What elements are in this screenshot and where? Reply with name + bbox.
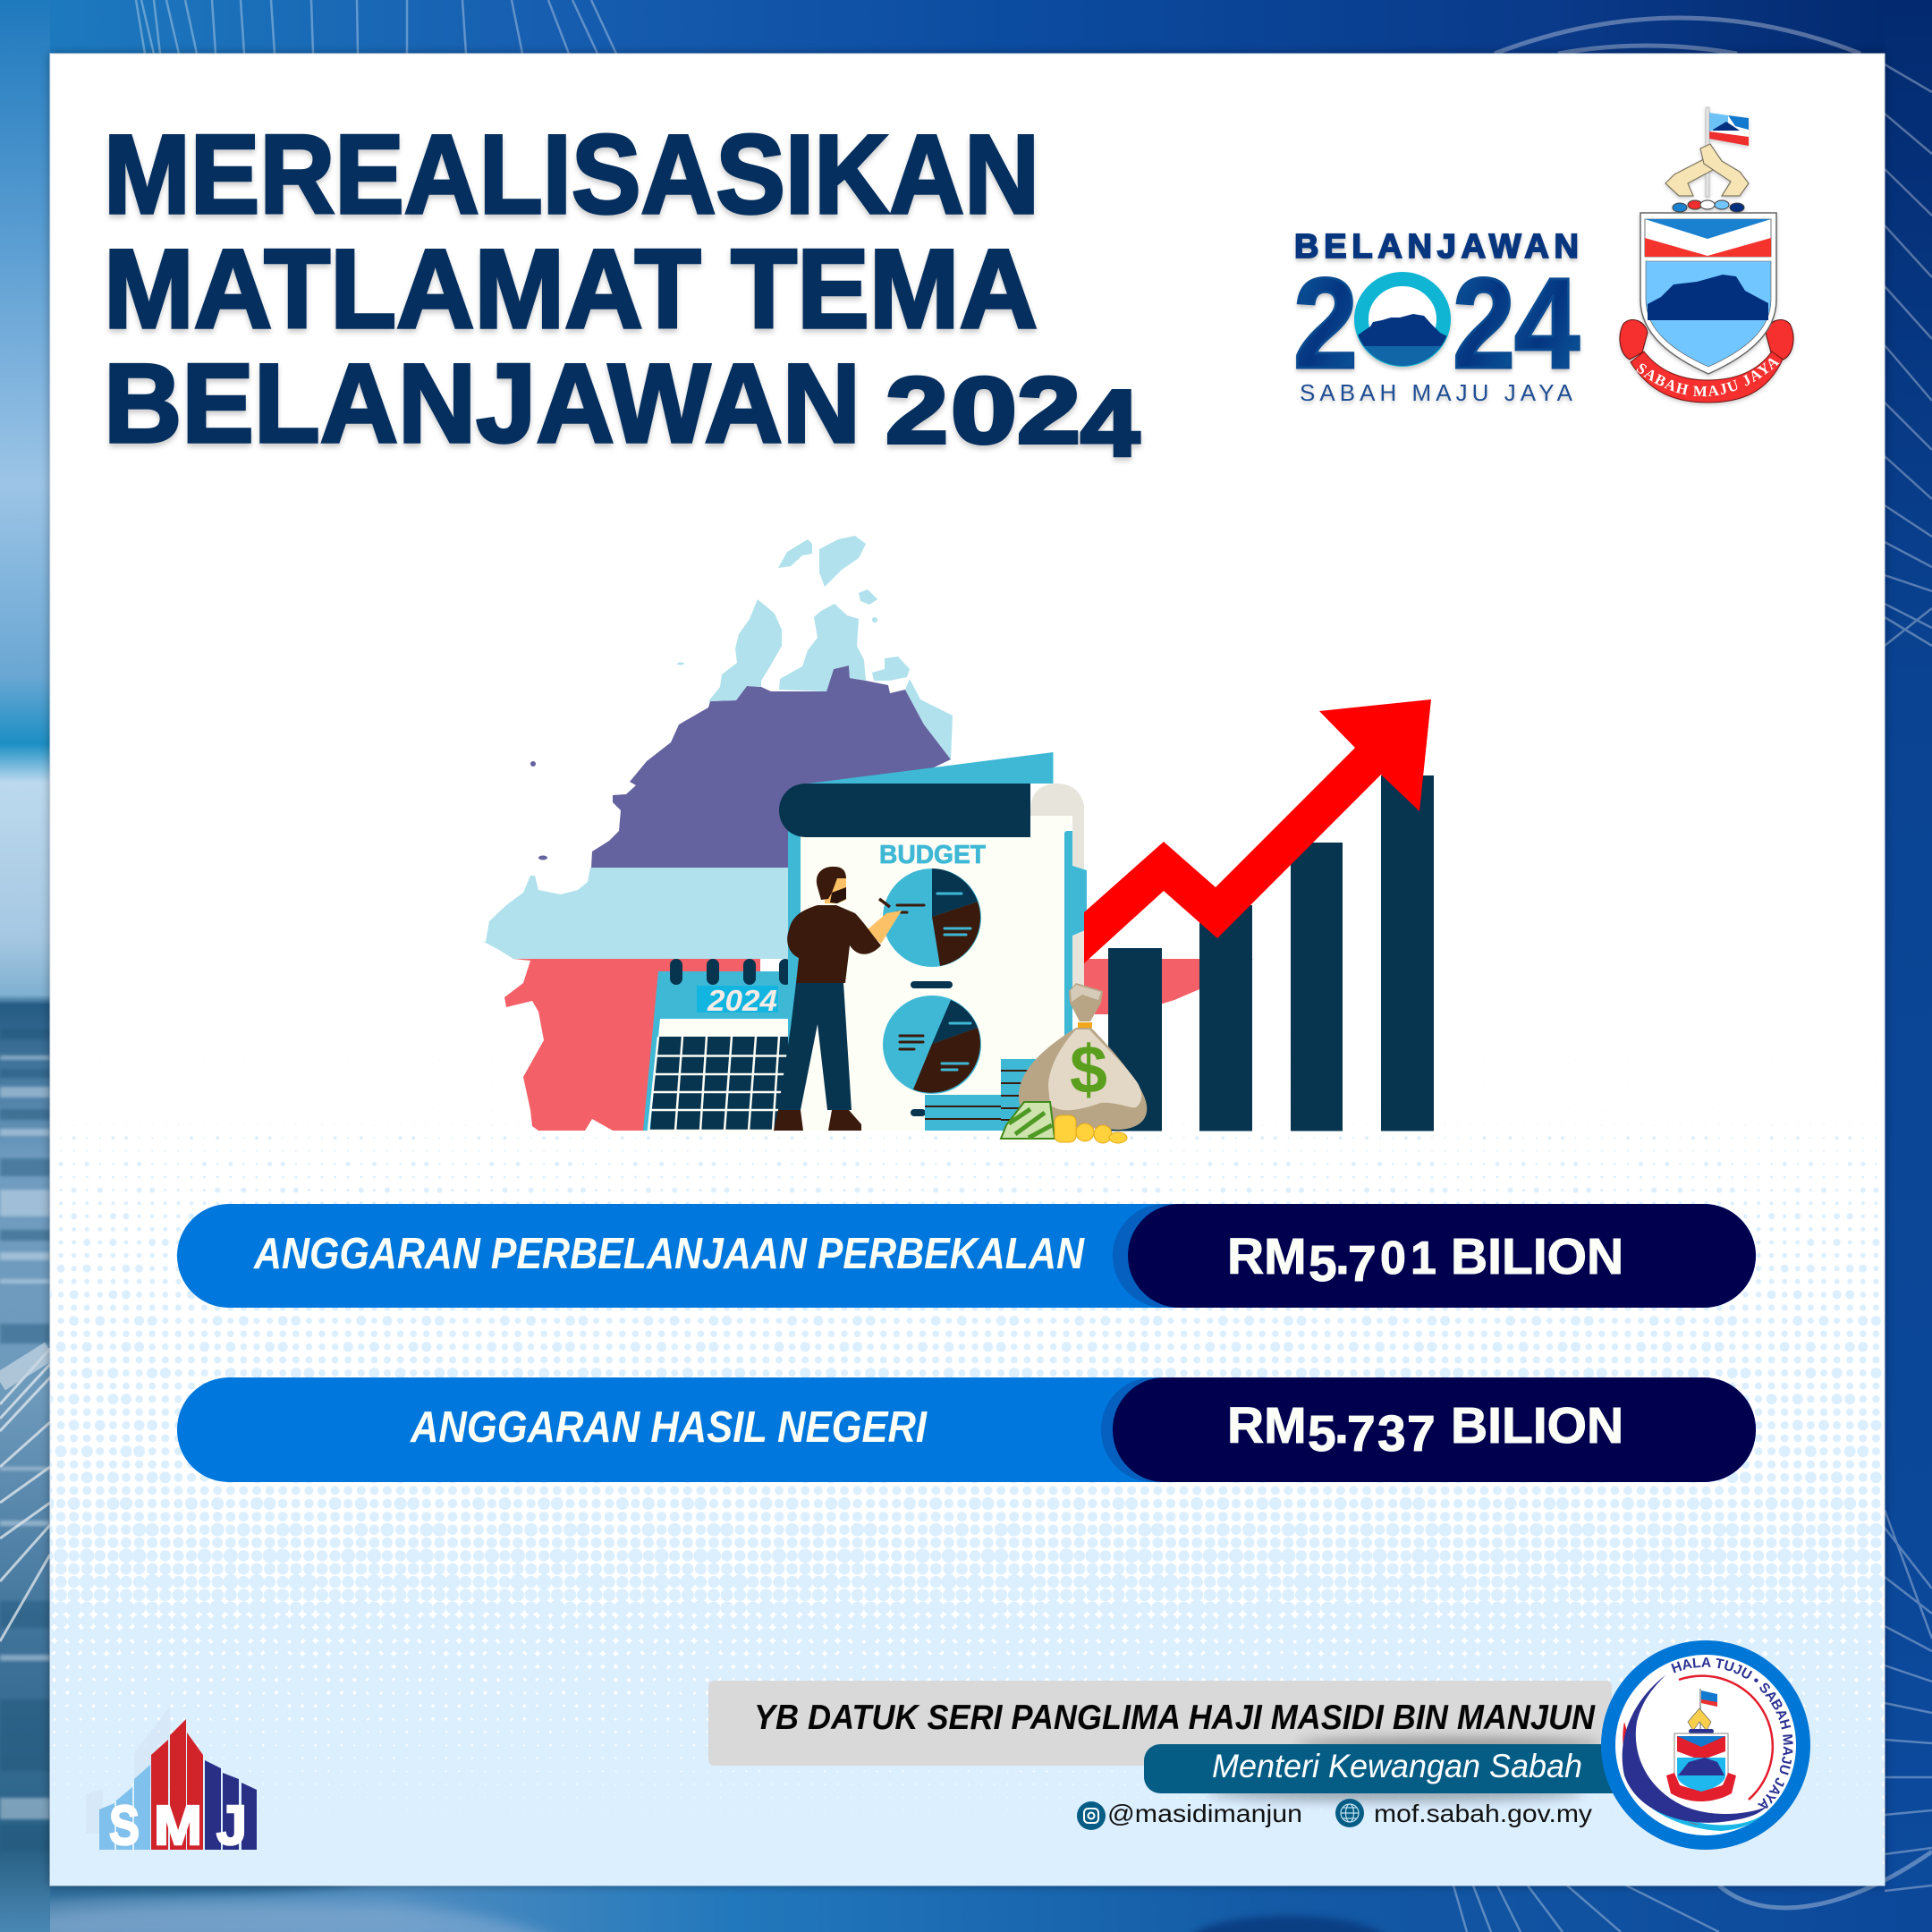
crest motto: SABAH MAJU JAYA (1636, 358, 1780, 397)
arrow: red growth (1084, 699, 1431, 963)
crest flag (1709, 113, 1749, 146)
logo: Sabah state crest (1617, 107, 1796, 406)
bar: anggaran perbelanjaan perbekalan: 5 (1309, 1235, 1337, 1292)
crest beads (1673, 200, 1744, 212)
banknotes (1001, 1102, 1055, 1139)
crest shield (1640, 213, 1776, 374)
bar: anggaran hasil negeri: ANGGARAN HASIL NEGERI (410, 1403, 928, 1452)
calendar (643, 959, 792, 1131)
title: MATLAMAT TEMA (104, 227, 1038, 352)
logo: Belanjawan 2024: 4 (1514, 251, 1580, 395)
title: 4 (1080, 371, 1140, 476)
bar chart (1108, 775, 1434, 1131)
logo: SMJ: J (216, 1795, 247, 1857)
logo: Belanjawan 2024: 2 (1453, 251, 1515, 395)
bar: anggaran hasil negeri: . (1335, 1397, 1349, 1454)
logo: SMJ: M (154, 1795, 202, 1857)
crest hands and pole (1665, 107, 1749, 197)
coins (1055, 1115, 1127, 1143)
bar: anggaran perbelanjaan perbekalan: 7 (1348, 1235, 1377, 1292)
bar: anggaran perbelanjaan perbekalan: RM (1227, 1228, 1307, 1285)
seal: Hala Tuju Sabah Maju Jaya (1601, 1640, 1810, 1850)
seal swooshes (1623, 1674, 1767, 1831)
social: instagram: @masidimanjun (1107, 1800, 1302, 1827)
bar: anggaran perbelanjaan perbekalan (177, 1204, 1756, 1308)
logo: SMJ (86, 1707, 257, 1857)
paper stack (925, 1059, 1038, 1131)
budget book (779, 752, 1087, 1131)
minister role plate: Menteri Kewangan Sabah (1212, 1748, 1582, 1784)
money bag: $ (1070, 1032, 1107, 1108)
pie chart: top (883, 869, 981, 967)
bar: anggaran hasil negeri: 7 (1407, 1405, 1450, 1462)
logo: Belanjawan 2024: 2 (1293, 251, 1358, 395)
minister name plate (708, 1681, 1612, 1766)
social: website: mof.sabah.gov.my (1374, 1800, 1592, 1827)
map: purple band (591, 665, 951, 868)
bar: anggaran hasil negeri: RM (1227, 1397, 1307, 1454)
bar: anggaran hasil negeri: 3 (1377, 1405, 1406, 1462)
title: MEREALISASIKAN (104, 113, 1039, 237)
person presenting (774, 867, 902, 1131)
logo: Belanjawan 2024: BELANJAWAN (1294, 228, 1579, 266)
minister name plate: YB DATUK SERI PANGLIMA HAJI MASIDI BIN MANJUN (754, 1699, 1596, 1737)
calendar: 2024 (707, 984, 777, 1017)
minister role plate (1144, 1737, 1619, 1802)
title: 2 (1017, 359, 1080, 463)
bar: anggaran hasil negeri: 5 (1308, 1405, 1336, 1462)
budget book: BUDGET (879, 841, 986, 869)
logo: SMJ: S (109, 1795, 140, 1857)
map: light blue band and islands (482, 536, 953, 959)
money bag (1001, 983, 1147, 1143)
title (104, 113, 1140, 476)
pie chart: bottom (883, 996, 981, 1094)
seal: Hala Tuju Sabah Maju Jaya: HALA TUJU • SABAH MAJU JAYA (1671, 1657, 1793, 1809)
bar: anggaran perbelanjaan perbekalan: . (1335, 1228, 1350, 1285)
bar: anggaran perbelanjaan perbekalan: 1 (1411, 1233, 1449, 1284)
bar: anggaran perbelanjaan perbekalan: BILION (1451, 1228, 1623, 1285)
logo: Belanjawan 2024: SABAH MAJU JAYA (1300, 379, 1573, 406)
title: 2 (886, 359, 948, 463)
map: small purple islands (530, 761, 547, 860)
seal small crest (1666, 1689, 1736, 1801)
title: BELANJAWAN (104, 342, 860, 466)
logo: Belanjawan 2024 (1293, 228, 1580, 406)
bar: anggaran hasil negeri: 7 (1347, 1405, 1376, 1462)
bar: anggaran hasil negeri: BILION (1451, 1397, 1623, 1454)
illustration: Sabah map and budget scene (482, 536, 1434, 1143)
bar: anggaran perbelanjaan perbekalan: ANGGARAN PERBELANJAAN PERBEKALAN (253, 1230, 1085, 1278)
halftone dot background (47, 1033, 1887, 1885)
bar: anggaran hasil negeri (177, 1377, 1756, 1482)
title: 0 (951, 359, 1017, 463)
crest ribbon scrolls (1620, 319, 1793, 360)
map: red band (504, 959, 760, 1131)
bar: anggaran perbelanjaan perbekalan: 0 (1380, 1233, 1406, 1284)
crest motto ribbon (1631, 352, 1783, 402)
